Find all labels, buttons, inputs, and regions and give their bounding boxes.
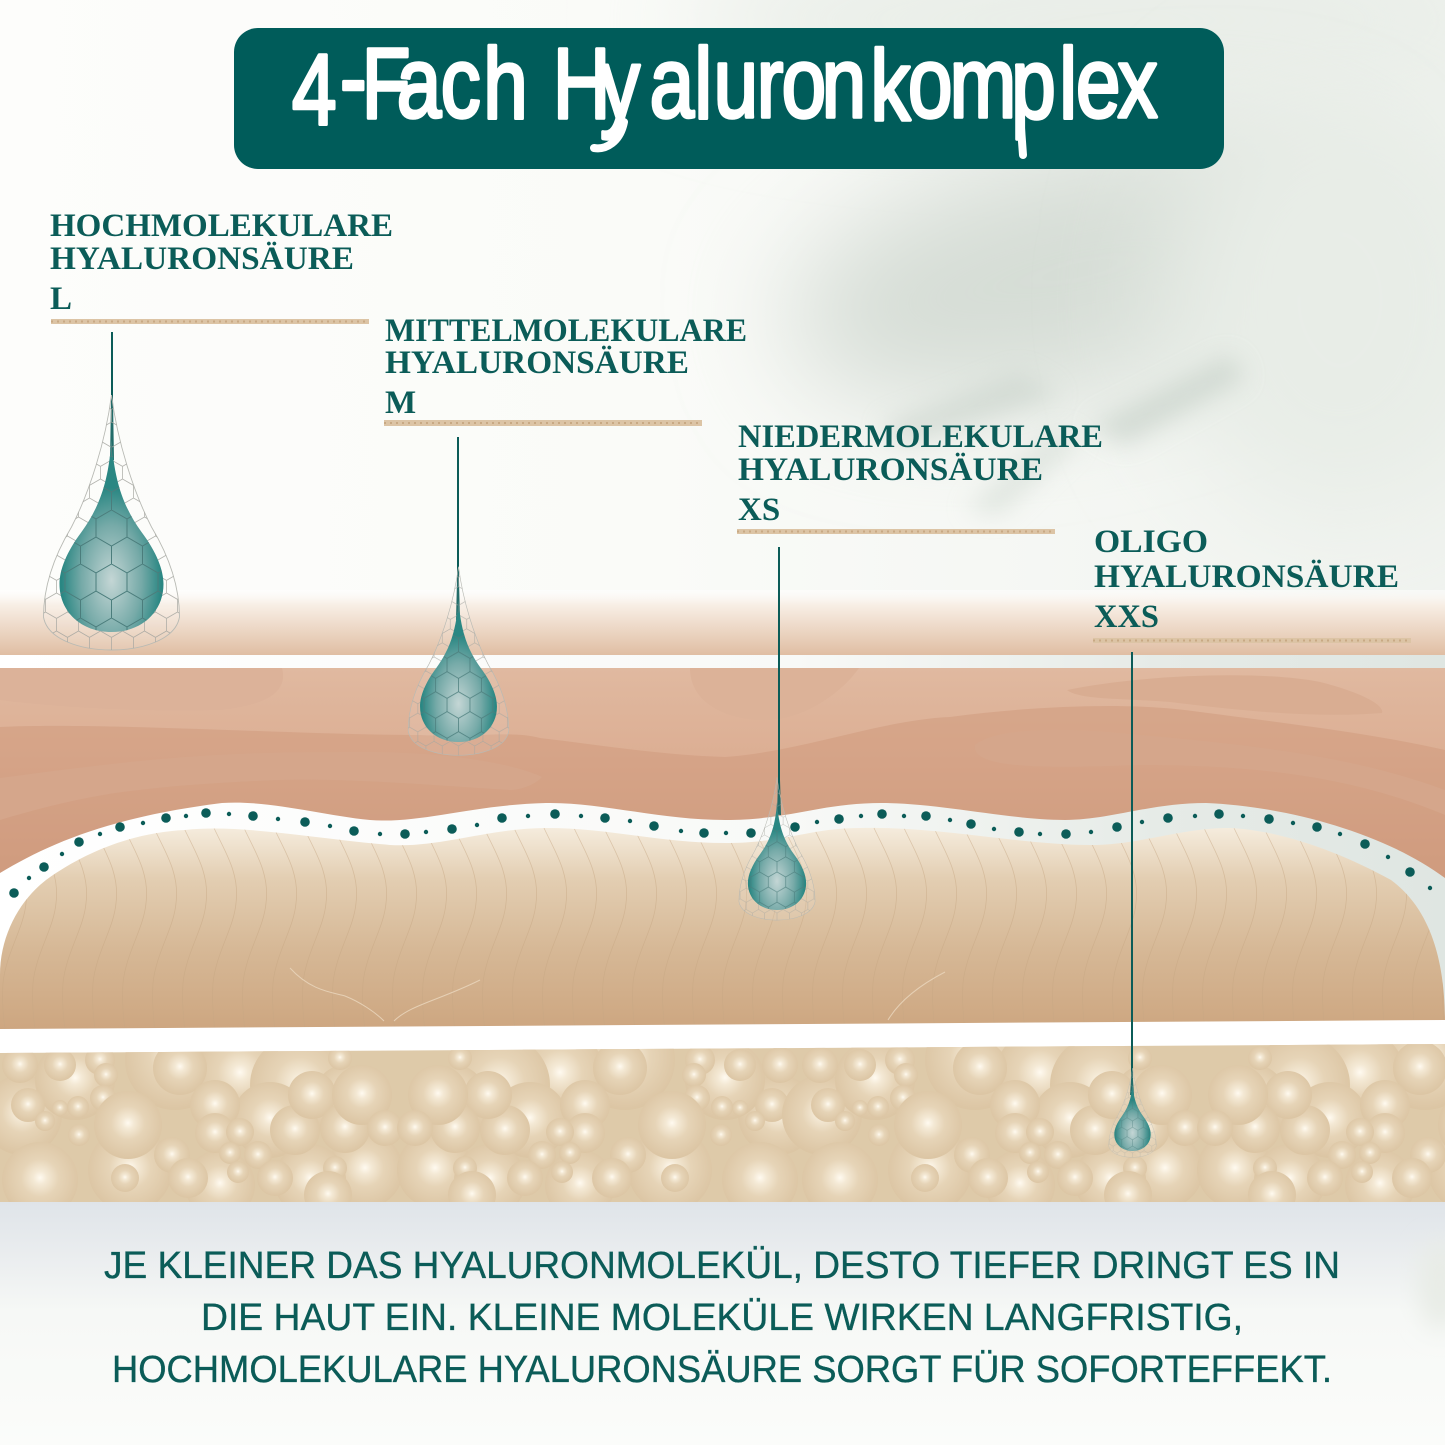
title text: y xyxy=(600,29,641,140)
stem and drop L xyxy=(44,332,180,650)
skin layer: dermis xyxy=(0,668,1445,900)
stem and drop XXS xyxy=(1109,652,1156,1157)
title descender strokes xyxy=(594,122,1023,155)
title text: m xyxy=(950,28,1016,139)
label: oligo XXS: OLIGO xyxy=(1094,524,1208,560)
label: oligo XXS: XXS xyxy=(1094,599,1159,635)
title text: p xyxy=(1011,29,1056,140)
label: mittelmolekulare M: MITTELMOLEKULARE xyxy=(385,313,747,349)
membrane band xyxy=(0,803,1445,1040)
fat layer bubbles xyxy=(0,1044,1445,1202)
title text: l xyxy=(1059,29,1077,140)
white stripe xyxy=(0,655,1445,669)
title text: n xyxy=(822,28,866,139)
title banner xyxy=(234,23,1224,169)
label: mittelmolekulare M: HYALURONSÄURE xyxy=(385,345,689,381)
title text xyxy=(292,23,1158,146)
title text: h xyxy=(483,29,528,140)
title text: o xyxy=(908,28,952,139)
label: niedermolekulare XS: HYALURONSÄURE xyxy=(738,452,1043,488)
title text: - xyxy=(340,23,367,134)
stem and drop XS xyxy=(739,547,815,920)
white stripe under hypodermis xyxy=(0,1020,1445,1054)
title text: 4 xyxy=(292,35,336,146)
title text: e xyxy=(1076,28,1120,139)
bottom explanatory text: JE KLEINER DAS HYALURONMOLEKÜL, DESTO TIEFER DRINGT ES IN xyxy=(104,1245,1340,1287)
title text: l xyxy=(694,29,712,140)
lower grey fade xyxy=(0,1202,1445,1445)
label: niedermolekulare XS: XS xyxy=(738,492,780,528)
title text: x xyxy=(1118,28,1158,139)
skin layer: epidermis surface xyxy=(0,590,1445,655)
label: mittelmolekulare M xyxy=(384,313,747,426)
label: hochmolekulare L: HOCHMOLEKULARE xyxy=(50,208,393,244)
title text: o xyxy=(782,28,826,139)
title text: H xyxy=(553,29,611,140)
title text: c xyxy=(441,28,481,139)
skin layer: hypodermis with wrinkle lines xyxy=(0,828,1445,1030)
title text: a xyxy=(650,28,695,139)
bottom explanatory text: DIE HAUT EIN. KLEINE MOLEKÜLE WIRKEN LANGFRISTIG, xyxy=(201,1297,1243,1339)
label: niedermolekulare XS xyxy=(737,419,1103,534)
label: hochmolekulare L: HYALURONSÄURE xyxy=(50,241,354,277)
label: oligo XXS xyxy=(1093,524,1411,643)
label: mittelmolekulare M: M xyxy=(385,385,416,421)
label: hochmolekulare L: L xyxy=(50,281,72,317)
title text: k xyxy=(870,31,911,142)
membrane dots xyxy=(9,808,1432,898)
stem and drop M xyxy=(408,437,509,755)
title text: u xyxy=(714,28,758,139)
label: hochmolekulare L xyxy=(50,208,393,324)
bottom explanatory text: HOCHMOLEKULARE HYALURONSÄURE SORGT FÜR SOFORTEFFEKT. xyxy=(112,1349,1332,1391)
title text: F xyxy=(362,29,410,140)
title text: r xyxy=(757,28,783,139)
bottom explanatory text xyxy=(104,1245,1340,1391)
label: niedermolekulare XS: NIEDERMOLEKULARE xyxy=(738,419,1103,455)
label: oligo XXS: HYALURONSÄURE xyxy=(1094,559,1399,595)
title text: a xyxy=(397,28,442,139)
corner leaf shadow xyxy=(1418,1240,1445,1330)
